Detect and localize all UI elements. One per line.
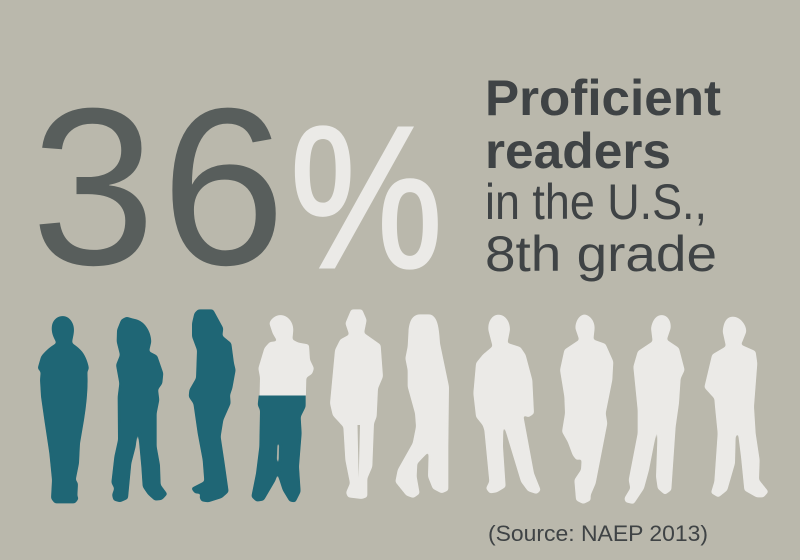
figure 3 bbox=[189, 310, 235, 502]
people row: light figures bbox=[331, 310, 768, 503]
figure 1 bbox=[38, 317, 88, 503]
source note: (Source: NAEP 2013) bbox=[488, 521, 708, 546]
big number 36 bbox=[31, 62, 286, 312]
figures 8 to 10 bbox=[561, 315, 768, 503]
figure 2 bbox=[112, 317, 167, 502]
heading: Proficient bbox=[485, 70, 721, 126]
figure 4: partly filled bbox=[252, 316, 313, 502]
heading: readers bbox=[485, 123, 671, 179]
heading: in the U.S., bbox=[485, 174, 707, 230]
big number 36: 6 bbox=[161, 62, 286, 312]
infographic canvas bbox=[38, 78, 768, 546]
big number 36: 3 bbox=[31, 62, 156, 312]
percent sign: % bbox=[290, 84, 443, 310]
leg gap of figure 5 bbox=[358, 425, 360, 478]
people row: teal figures bbox=[38, 310, 235, 503]
heading: 8th grade bbox=[485, 226, 717, 282]
heading bbox=[485, 70, 721, 282]
figures 5 to 7 bbox=[331, 310, 540, 498]
